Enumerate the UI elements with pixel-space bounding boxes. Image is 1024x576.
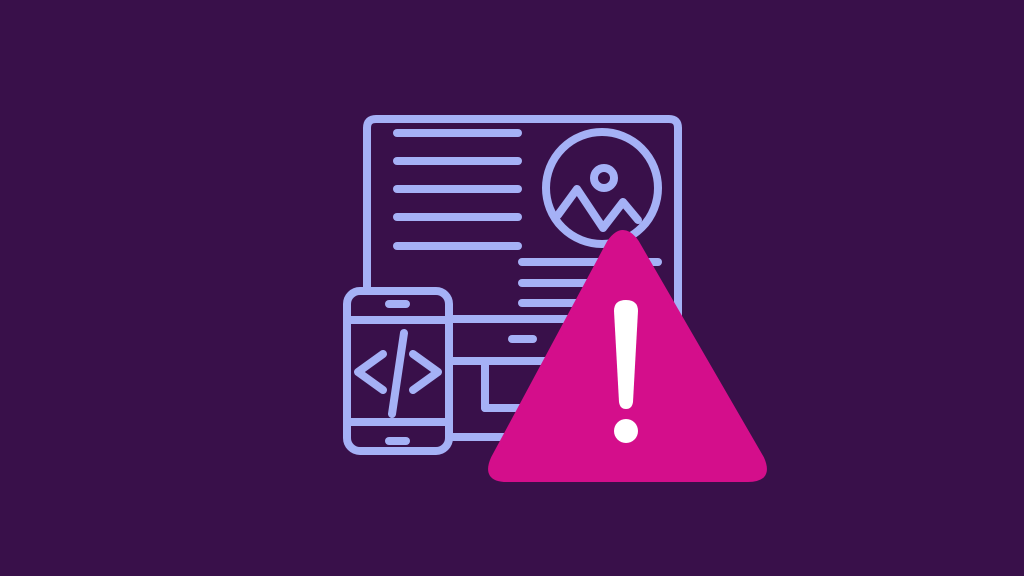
icon: warning triangle <box>490 232 765 480</box>
icon: monitor / web page <box>367 119 678 437</box>
exclamation mark <box>614 300 638 443</box>
icon: phone with code <box>347 291 449 451</box>
